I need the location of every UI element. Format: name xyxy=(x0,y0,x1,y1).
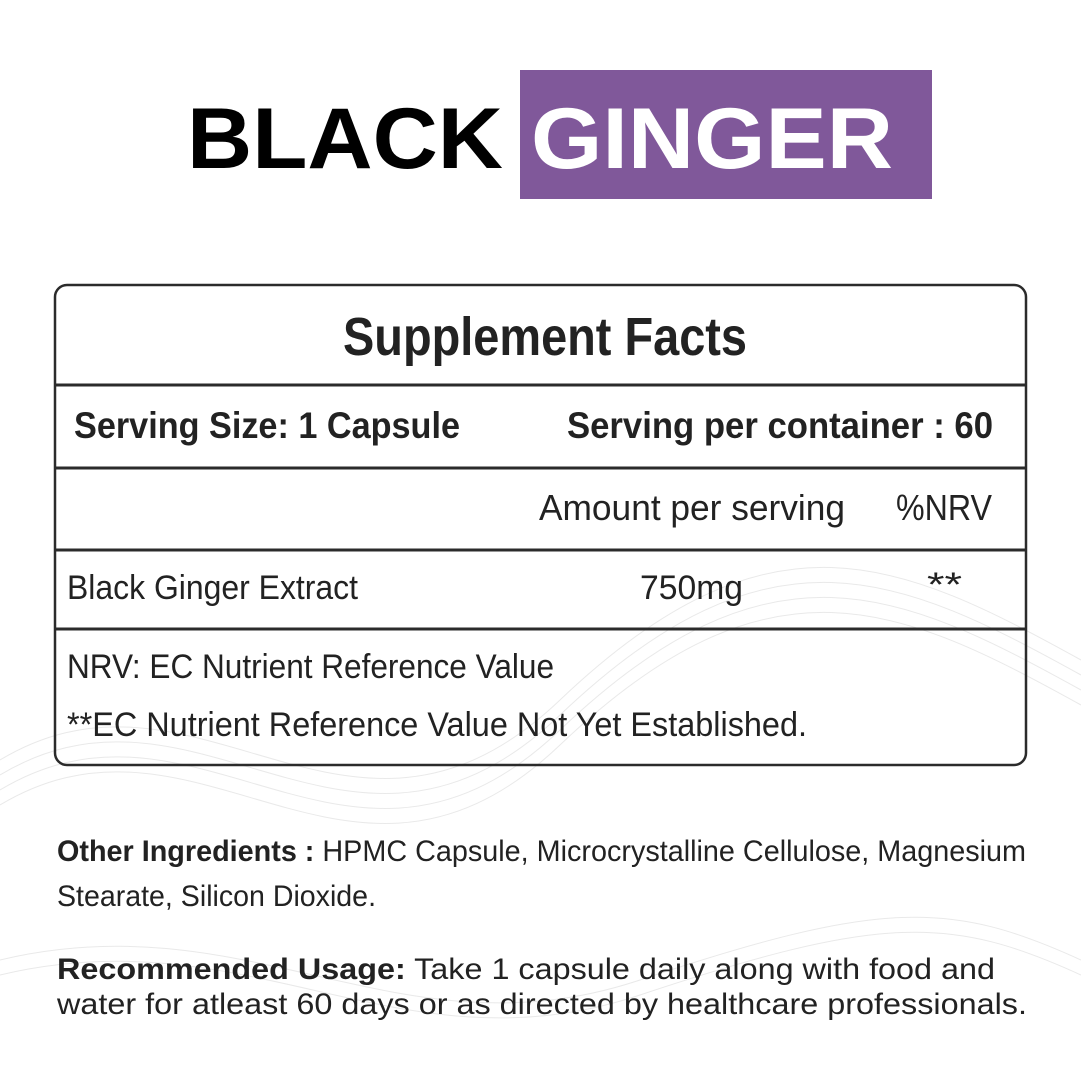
footnote: NRV: NRV: EC Nutrient Reference Value xyxy=(67,648,554,686)
title: GINGER box xyxy=(520,70,932,199)
column header: amount: Amount per serving xyxy=(539,487,845,528)
text block: recommended usage xyxy=(56,953,1027,1021)
ingredient row: Black Ginger Extract xyxy=(67,569,359,607)
heading: Supplement Facts: Supplement Facts xyxy=(343,307,747,367)
ingredient row: 750mg xyxy=(640,569,743,607)
title xyxy=(187,70,932,199)
title: GINGER box: GINGER xyxy=(531,91,893,187)
title: BLACK: BLACK xyxy=(187,91,503,187)
text block: other ingredients xyxy=(57,835,1026,913)
ingredient row xyxy=(67,566,962,607)
text block: recommended usage: water for atleast 60 days or as directed by healthcare professionals. xyxy=(56,988,1027,1021)
text block: recommended usage: Recommended Usage: Take 1 capsule daily along with food and xyxy=(57,953,995,986)
footnote: not established: **EC Nutrient Reference Value Not Yet Established. xyxy=(67,706,807,744)
text block: other ingredients: Stearate, Silicon Dioxide. xyxy=(57,880,376,913)
text block: other ingredients: Other Ingredients : HPMC Capsule, Microcrystalline Cellulose, Magnesium xyxy=(57,835,1026,868)
column header: NRV: %NRV xyxy=(896,487,992,528)
ingredient row: ** xyxy=(927,566,962,604)
servings per container: Serving per container : 60 xyxy=(567,405,993,446)
panel: supplement facts table xyxy=(55,285,1026,765)
serving size: Serving Size: 1 Capsule xyxy=(74,405,460,446)
